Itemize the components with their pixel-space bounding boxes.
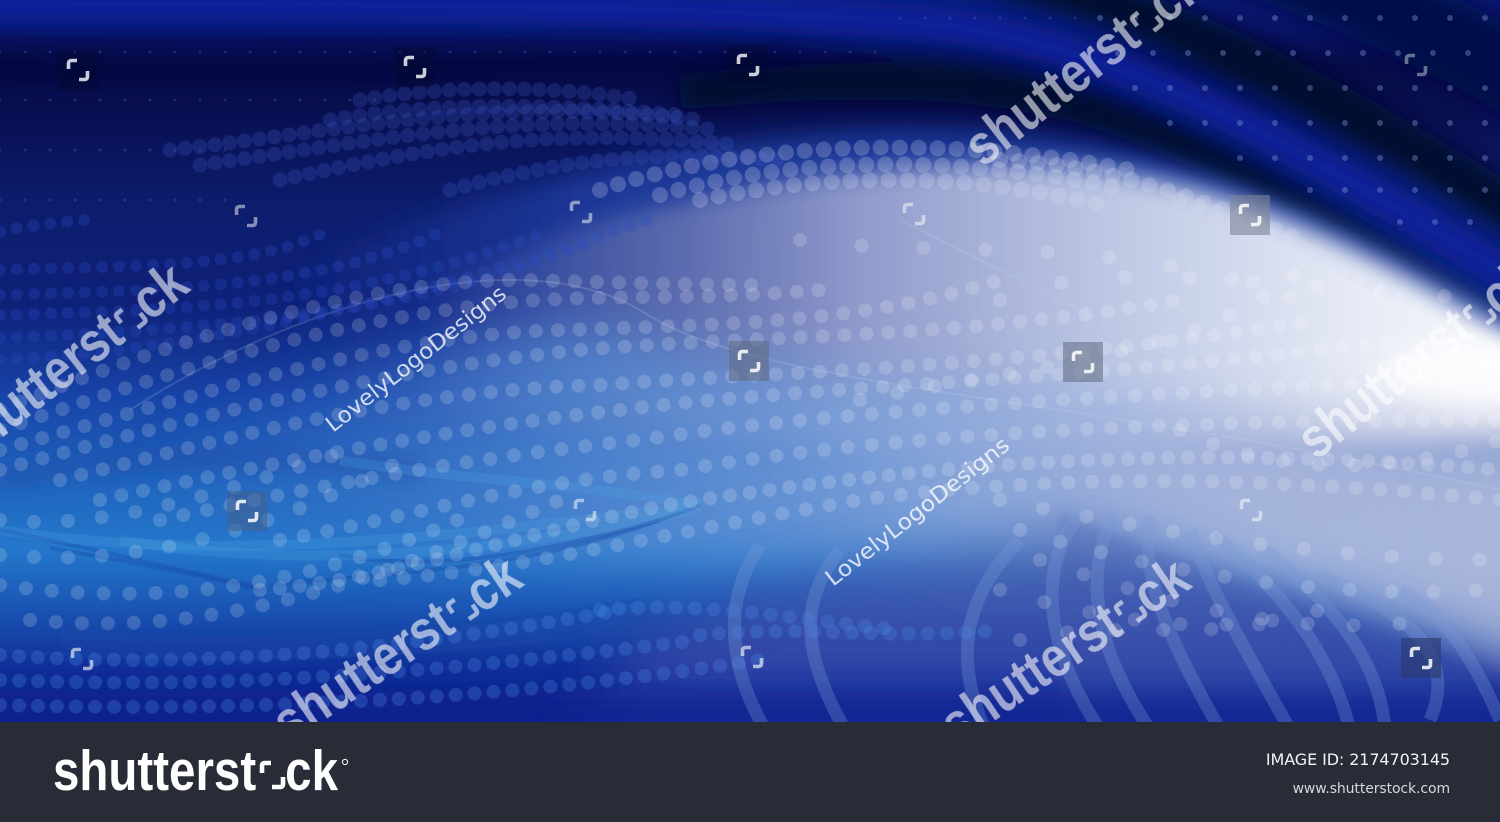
lower right blue mass (560, 525, 1500, 760)
dark band on upper left (0, 60, 800, 71)
dense dark dot cloud top centre (170, 89, 780, 190)
top blue ribbon (0, 0, 1500, 450)
fine wave streaks lower left (0, 505, 700, 658)
dark rows left (0, 215, 660, 360)
blue halo above the white swoosh (280, 131, 1500, 440)
main dotted rows (0, 240, 1500, 640)
footer bar (0, 722, 1500, 822)
lower blue dots (0, 607, 1000, 707)
bright corner on the right (1380, 342, 1500, 402)
bottom dark blue (0, 690, 1500, 770)
site url: www.shutterstock.com (1293, 781, 1450, 797)
fingerprint arcs lower right (734, 512, 1500, 730)
watermark icons (58, 45, 1441, 678)
top dot grid (1100, 18, 1500, 222)
watermark: contributor name: LovelyLogoDesigns (321, 281, 512, 438)
right soft lower fade (800, 420, 1500, 690)
white swoosh (420, 165, 1500, 450)
watermark: contributor name: LovelyLogoDesigns (821, 433, 1015, 592)
mid light wave (130, 329, 1500, 640)
watermark: contributor name (321, 281, 1015, 592)
footer logo (54, 749, 348, 790)
image id: IMAGE ID: 2174703145 (1266, 750, 1450, 769)
